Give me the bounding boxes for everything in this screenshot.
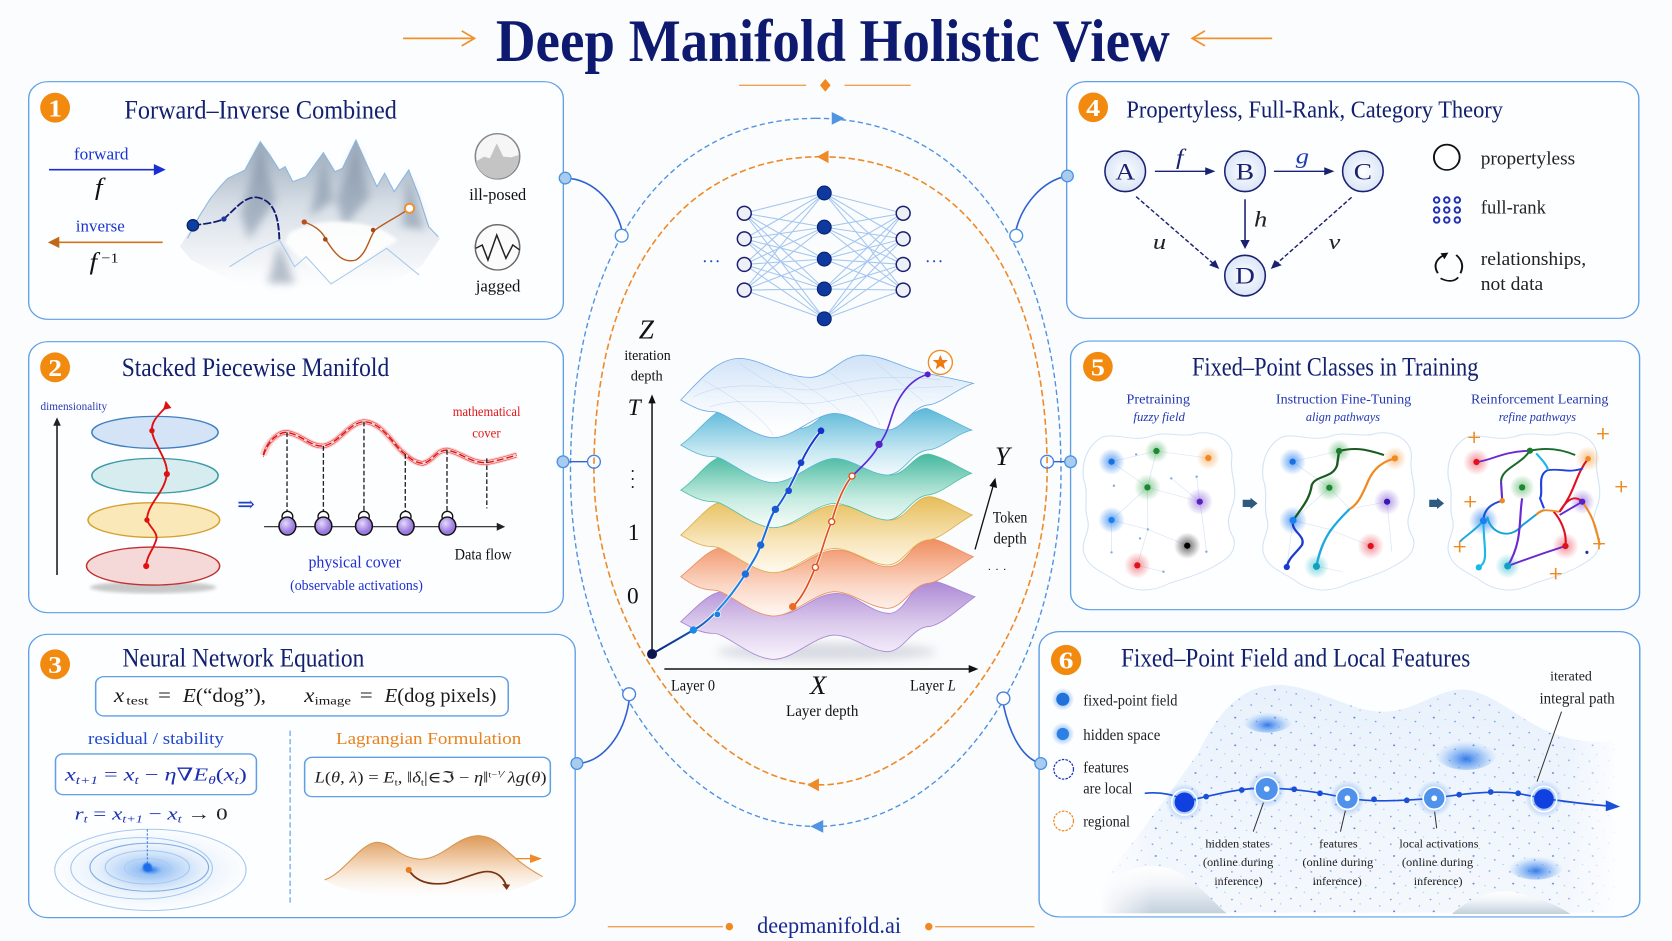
node: local activations xyxy=(1416,780,1452,816)
equation box: encoders: = xyxy=(360,684,373,707)
label: iterated integral path xyxy=(1539,670,1615,707)
commutative diagram: f xyxy=(1176,145,1187,170)
column head: reinforcement learning xyxy=(1471,392,1609,424)
badge 2: 2 xyxy=(48,355,62,382)
layer: orange xyxy=(681,538,973,616)
layer shadow xyxy=(717,642,937,661)
path: orange to purple xyxy=(789,371,931,610)
equation box: update rule: θ xyxy=(208,774,216,787)
label: physical cover: physical cover xyxy=(308,553,402,572)
field: pretraining xyxy=(1083,433,1235,590)
arrow: title right xyxy=(1192,31,1272,46)
outer blue dashed cycle xyxy=(570,112,1061,833)
icon: ill-posed xyxy=(469,134,526,204)
legend: propertyless xyxy=(1434,145,1575,170)
connector: panel 1 to cycle xyxy=(559,172,628,242)
legend: features are local: are local xyxy=(1083,780,1133,797)
inverse arrow and label: −1 xyxy=(101,252,119,266)
axis labels: T xyxy=(628,395,643,421)
badge 5 xyxy=(1083,352,1113,382)
equation box: update rule: η∇E xyxy=(164,766,206,785)
equation box: lagrangian xyxy=(305,757,550,797)
equation: residual: t xyxy=(84,814,89,825)
data flow axis with beads xyxy=(264,511,505,535)
label: mathematical cover: mathematical xyxy=(453,405,520,420)
column head: instruction fine-tuning: Instruction Fine-Tuning xyxy=(1276,392,1412,407)
label: physical cover xyxy=(290,553,423,594)
label: data flow: Data flow xyxy=(455,545,512,563)
label: features: features xyxy=(1319,837,1358,850)
label: iterated integral path: iterated xyxy=(1550,670,1592,684)
subheading: residual: residual / stability xyxy=(88,729,225,749)
manifold surface xyxy=(1100,685,1616,914)
arrow: fine-tuning to reinforcement xyxy=(1429,498,1444,509)
title ornament xyxy=(739,79,911,92)
equation box: encoders: = xyxy=(158,684,171,707)
commutative diagram: A xyxy=(1115,159,1136,185)
connector: panel 6 to cycle xyxy=(997,692,1047,769)
commutative diagram: B xyxy=(1236,159,1254,185)
axis labels: Z xyxy=(639,314,655,344)
mathematical cover wave xyxy=(263,420,517,465)
equation box: update rule: − xyxy=(139,766,164,785)
projection lines xyxy=(287,422,487,515)
equation box: update rule: x xyxy=(64,766,76,785)
panel: 1 forward-inverse combined xyxy=(29,82,563,319)
panel: 5 fixed-point classes xyxy=(1071,341,1640,610)
connector: panel 4 to cycle xyxy=(1010,170,1073,242)
equation box: lagrangian: δ xyxy=(412,769,421,786)
inverse arrow and label: inverse xyxy=(76,217,125,235)
heading: Neural Network Equation xyxy=(122,643,364,673)
field: reinforcement learning xyxy=(1448,428,1627,590)
commutative diagram xyxy=(1105,144,1383,296)
legend: relationships: relationships, xyxy=(1481,249,1586,270)
label: features: inference) xyxy=(1313,874,1362,888)
icon: ill-posed: ill-posed xyxy=(469,185,526,204)
equation box: lagrangian: L(θ, λ) = E xyxy=(315,769,394,786)
axis labels: depth xyxy=(993,530,1027,547)
label: local activations: inference) xyxy=(1414,874,1462,888)
axis labels: Layer 0 xyxy=(671,678,715,695)
implies arrow: ⇒ xyxy=(237,493,255,517)
arrow: title left xyxy=(403,31,475,46)
integral path xyxy=(1145,770,1620,821)
label: local activations: (online during xyxy=(1402,855,1473,869)
forward arrow and label: forward xyxy=(74,144,129,163)
axis labels: Layer L xyxy=(910,678,956,695)
equation: residual: − xyxy=(143,804,167,824)
equation: residual: t+1 xyxy=(122,814,143,825)
inverse arrow and label xyxy=(48,217,163,275)
layer: purple xyxy=(681,580,975,659)
label: hidden states: (online during xyxy=(1203,855,1274,869)
badge 4: 4 xyxy=(1086,95,1100,121)
equation box: lagrangian: , ‖ xyxy=(398,769,412,786)
equation box: encoders: E(“dog”), xyxy=(182,684,266,707)
legend: propertyless: propertyless xyxy=(1481,149,1575,169)
neural network diagram xyxy=(704,186,942,326)
icon: star goal xyxy=(928,350,952,374)
path: blue xyxy=(647,427,824,659)
label: iterated integral path: integral path xyxy=(1539,690,1615,707)
stacked discs xyxy=(86,401,220,593)
legend: features are local: features xyxy=(1083,759,1129,776)
inverse arrow and label: f xyxy=(90,248,101,275)
panel: 3 neural network equation xyxy=(29,634,575,918)
axis labels: 0 xyxy=(627,583,639,609)
equation box: lagrangian: t xyxy=(421,778,424,788)
label: local activations: local activations xyxy=(1399,837,1478,850)
badge 5: 5 xyxy=(1091,354,1105,381)
axes xyxy=(648,394,997,673)
equation box: encoders: image xyxy=(315,693,351,707)
leader lines xyxy=(1253,712,1562,832)
equation: residual: r xyxy=(75,804,85,824)
badge 1: 1 xyxy=(48,95,62,122)
label: mathematical cover: cover xyxy=(472,426,501,441)
legend: hidden space xyxy=(1051,723,1161,745)
axis labels: X xyxy=(809,670,828,700)
column head: instruction fine-tuning xyxy=(1276,392,1412,424)
column head: instruction fine-tuning: align pathways xyxy=(1306,410,1380,424)
equation: residual: t xyxy=(178,814,183,825)
heading: Forward–Inverse Combined xyxy=(124,95,397,125)
forward arrow and label: f xyxy=(95,174,107,201)
lagrangian surface xyxy=(325,836,543,899)
node: start xyxy=(1166,783,1203,821)
badge 3 xyxy=(40,649,70,679)
equation box: update rule: x xyxy=(223,766,235,785)
connector: panel 5 to cycle xyxy=(1041,455,1076,468)
equation box: update rule xyxy=(55,754,256,795)
equation box: lagrangian: η‖ xyxy=(474,769,488,786)
equation box: encoders: test xyxy=(126,693,149,707)
node: hidden states xyxy=(1248,770,1286,808)
connector: panel 2 to cycle xyxy=(557,455,600,468)
panel: 4 category theory xyxy=(1067,82,1639,318)
heading: Stacked Piecewise Manifold xyxy=(122,353,389,383)
legend: features are local xyxy=(1054,759,1133,797)
heading: Fixed–Point Field and Local Features xyxy=(1121,643,1470,673)
equation box: lagrangian: t−⅟ xyxy=(488,771,505,780)
equation: residual: x xyxy=(111,804,123,824)
equation box: encoders: x xyxy=(303,684,315,707)
heading: Fixed–Point Classes in Training xyxy=(1192,353,1478,382)
panel: 2 stacked piecewise manifold xyxy=(29,342,563,613)
icon: jagged: jagged xyxy=(475,277,520,295)
badge 3: 3 xyxy=(48,652,62,679)
column head: pretraining: Pretraining xyxy=(1126,392,1190,407)
panel: 6 fixed-point field xyxy=(1039,632,1640,917)
commutative diagram: v xyxy=(1329,230,1340,254)
axis labels: Token xyxy=(993,510,1028,527)
axis labels: Y xyxy=(995,441,1013,471)
label: features: (online during xyxy=(1302,855,1373,869)
label: hidden states: inference) xyxy=(1214,874,1263,888)
legend: regional: regional xyxy=(1083,813,1130,830)
equation box: encoders xyxy=(96,677,508,716)
layer: yellow xyxy=(681,497,972,573)
node: features xyxy=(1329,780,1365,816)
axis labels: Layer depth xyxy=(786,703,859,720)
commutative diagram: D xyxy=(1235,263,1255,289)
column head: reinforcement learning: Reinforcement Learning xyxy=(1471,392,1609,407)
legend: regional xyxy=(1054,811,1130,831)
axis labels: iteration xyxy=(624,348,671,364)
title: Deep Manifold Holistic View xyxy=(496,8,1170,75)
badge 6: 6 xyxy=(1059,647,1073,674)
commutative diagram: u xyxy=(1153,230,1166,254)
mountain landscape xyxy=(180,140,440,293)
equation box: update rule: ) xyxy=(239,766,247,785)
axis labels: 1 xyxy=(628,520,639,546)
icon: jagged xyxy=(475,225,520,295)
equation box: encoders: x xyxy=(113,684,125,707)
field: instruction fine-tuning xyxy=(1263,433,1414,590)
column head: reinforcement learning: refine pathways xyxy=(1499,410,1576,424)
commutative diagram: C xyxy=(1354,159,1372,185)
label: hidden states: hidden states xyxy=(1205,837,1270,850)
label: physical cover: (observable activations) xyxy=(290,578,423,594)
swirl: convergence xyxy=(55,829,246,911)
equation box: lagrangian: |∈ℑ − xyxy=(424,769,474,786)
label: mathematical cover xyxy=(453,405,520,441)
central stacked manifold chart xyxy=(624,314,1028,720)
equation box: update rule: t+1 xyxy=(76,774,98,787)
label: hidden states xyxy=(1203,837,1274,888)
legend: relationships: not data xyxy=(1481,274,1543,295)
equation box: update rule: = xyxy=(98,766,124,785)
forward arrow and label xyxy=(49,144,166,201)
badge 1 xyxy=(40,93,70,123)
equation box: update rule: t xyxy=(235,774,240,787)
badge 2 xyxy=(40,352,70,382)
arrow: pretraining to fine-tuning xyxy=(1243,498,1258,509)
legend: relationships xyxy=(1436,249,1586,295)
equation box: encoders: E(dog pixels) xyxy=(384,684,496,707)
equation: residual: = xyxy=(88,804,112,824)
label: local activations xyxy=(1399,837,1478,888)
descent path xyxy=(187,197,279,239)
legend: full-rank xyxy=(1434,197,1547,223)
divider xyxy=(289,731,292,905)
column head: pretraining xyxy=(1126,392,1190,424)
legend: fixed-point field: fixed-point field xyxy=(1083,692,1178,709)
label: features xyxy=(1302,837,1373,888)
column head: pretraining: fuzzy field xyxy=(1133,410,1185,424)
footer: deepmanifold.ai xyxy=(757,913,902,939)
badge 4 xyxy=(1078,92,1108,122)
legend: full-rank: full-rank xyxy=(1481,198,1547,218)
inner orange dashed cycle xyxy=(594,150,1047,791)
layer: cyan xyxy=(681,405,972,483)
equation box: update rule: x xyxy=(122,766,135,785)
equation box: lagrangian: t xyxy=(395,778,398,788)
connector: panel 3 to cycle xyxy=(571,688,636,769)
axis labels xyxy=(624,314,1028,720)
layer: teal xyxy=(681,454,972,528)
layer: top grid xyxy=(681,355,973,438)
node: end xyxy=(1525,780,1563,818)
equation: residual: → 0 xyxy=(182,804,228,824)
equation box: lagrangian: λg(θ) xyxy=(508,769,546,786)
commutative diagram: h xyxy=(1254,207,1267,232)
heading: Propertyless, Full-Rank, Category Theory xyxy=(1126,96,1503,123)
dimensionality axis: dimensionality xyxy=(41,399,108,413)
legend: hidden space: hidden space xyxy=(1083,727,1161,744)
dimensionality axis xyxy=(41,399,108,575)
equation: residual: x xyxy=(166,804,179,824)
legend: fixed-point field xyxy=(1051,688,1178,711)
footer xyxy=(608,913,1034,939)
badge 6 xyxy=(1051,645,1081,675)
axis labels: depth xyxy=(631,369,663,385)
subheading: lagrangian: Lagrangian Formulation xyxy=(336,729,522,749)
equation box: update rule: ( xyxy=(216,766,224,785)
ascent path xyxy=(302,204,414,261)
commutative diagram: g xyxy=(1296,144,1309,169)
equation box: update rule: t xyxy=(134,774,139,787)
